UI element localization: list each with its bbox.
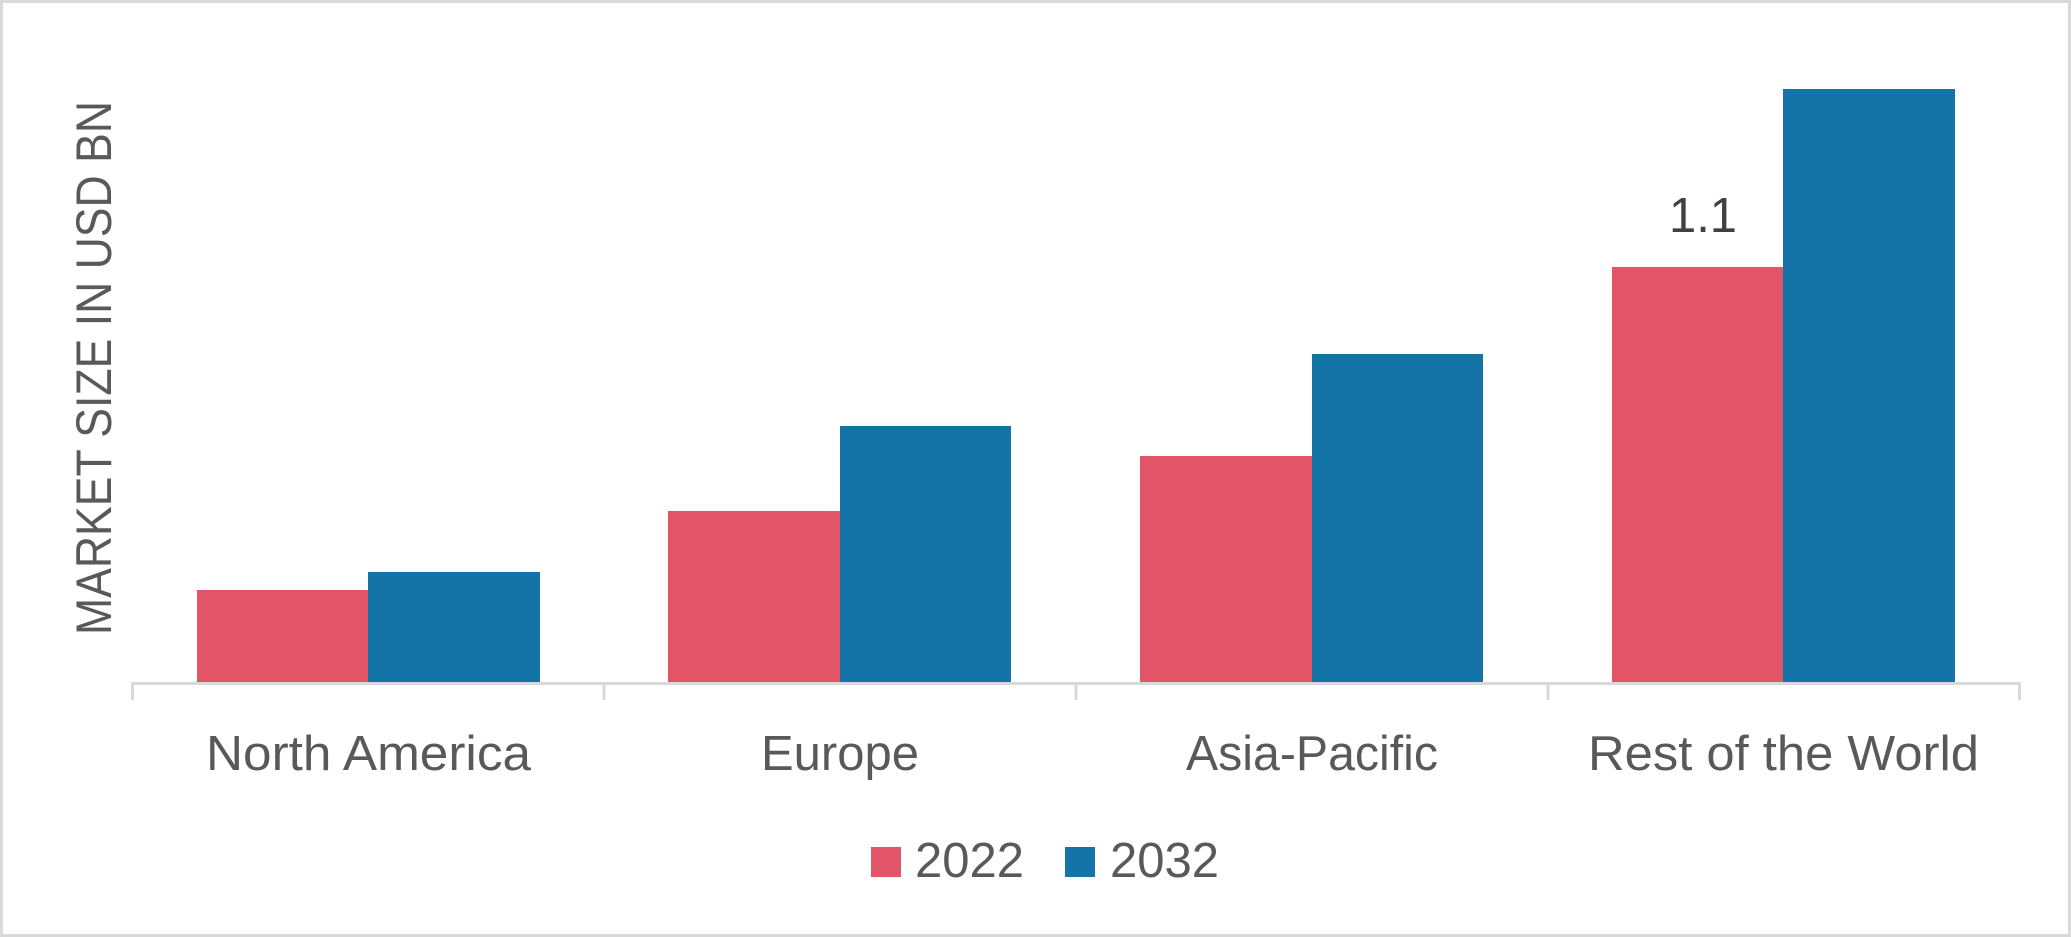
category labels: North America <box>206 727 532 781</box>
bars: Europe <box>668 426 1011 682</box>
legend <box>871 834 1219 888</box>
category labels: Rest of the World <box>1588 727 1979 781</box>
x axis with ticks <box>132 684 2020 700</box>
bars: North America <box>197 572 540 682</box>
legend: 2032 <box>1110 834 1219 888</box>
legend: 2022 <box>915 834 1024 888</box>
data label: 1.1: 1.1 <box>1669 189 1737 243</box>
category labels: Europe <box>761 727 919 781</box>
bars: Asia-Pacific <box>1140 354 1483 682</box>
category labels <box>206 727 1979 781</box>
y-axis title: MARKET SIZE IN USD BN <box>66 101 122 635</box>
category labels: Asia-Pacific <box>1186 727 1438 781</box>
bars: Rest of the World <box>1612 89 1955 682</box>
